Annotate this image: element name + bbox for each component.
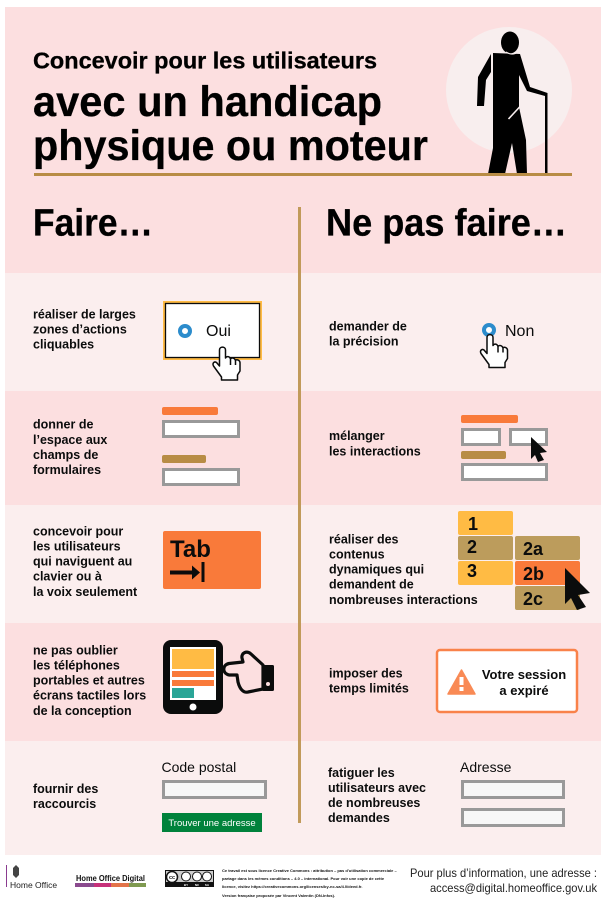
illustration: small radio button — [481, 323, 534, 368]
illustration: nested menu: 2c — [523, 589, 543, 609]
contact text: access@digital.homeoffice.gov.uk — [430, 881, 598, 895]
text: time limits: temps limités — [329, 682, 409, 696]
illustration: long address form — [460, 759, 564, 826]
text: dynamic content: réaliser des — [329, 532, 399, 546]
text: too many demands: de nombreuses — [328, 796, 420, 810]
title — [33, 48, 428, 170]
header rule — [34, 173, 572, 176]
illustration: postcode shortcut form: Code postal — [162, 759, 236, 775]
centre divider — [298, 207, 301, 823]
illustration: session expired alert: Votre session — [482, 667, 566, 682]
illustration: long address form: Adresse — [460, 759, 512, 775]
text: too many demands: utilisateurs avec — [328, 781, 426, 795]
logo: Home Office: Home Office — [10, 880, 57, 890]
illustration: large radio button: Oui — [206, 323, 231, 340]
text: keyboard users: la voix seulement — [33, 585, 138, 599]
text: space form fields: champs de — [33, 448, 98, 462]
logo: Home Office Digital: Home Office Digital — [76, 874, 145, 883]
text: too many demands: demandes — [328, 811, 390, 825]
text: small click area: demander de — [329, 320, 407, 334]
illustration: nested menu: 2 — [467, 537, 477, 557]
heading: don't: Ne pas faire… — [326, 202, 567, 244]
text: dynamic content: demandent de — [329, 578, 414, 592]
text: space form fields: formulaires — [33, 463, 101, 477]
icon: person with cane — [446, 27, 572, 174]
illustration: large radio button — [164, 302, 260, 380]
licence text: licence, visitez https://creativecommons.org/licenses/by-nc-sa/4.0/deed.fr. — [222, 884, 362, 889]
text: dynamic content: dynamiques qui — [329, 562, 424, 576]
text: mobile and touch: les téléphones — [33, 658, 120, 672]
text: shortcuts: raccourcis — [33, 797, 96, 811]
text: mixed interactions: mélanger — [329, 429, 385, 443]
text: mobile and touch: ne pas oublier — [33, 644, 118, 658]
text: dynamic content: contenus — [329, 548, 385, 562]
text: shortcuts: fournir des — [33, 782, 98, 796]
logo: Home Office — [6, 865, 57, 890]
text: small click area: la précision — [329, 334, 398, 348]
text: keyboard users: clavier ou à — [33, 570, 102, 584]
text: space form fields: donner de — [33, 418, 93, 432]
illustration: postcode shortcut form — [162, 759, 266, 832]
illustration: Tab key — [163, 531, 261, 589]
text: large click areas: réaliser de larges — [33, 308, 136, 322]
title: physique ou moteur — [33, 122, 428, 170]
icon: Creative Commons badge: BY — [184, 883, 188, 887]
text: space form fields: l’espace aux — [33, 433, 107, 447]
text: dynamic content: nombreuses interactions — [329, 593, 478, 607]
licence text: partage dans les mêmes conditions – 4.0 – international. Pour voir une copie de cette — [222, 876, 385, 881]
text: keyboard users: concevoir pour — [33, 524, 123, 538]
text: large click areas: cliquables — [33, 338, 94, 352]
illustration: session expired alert: a expiré — [499, 683, 549, 698]
text: mixed interactions: les interactions — [329, 444, 421, 458]
text: keyboard users: qui naviguent au — [33, 554, 132, 568]
illustration: session expired alert — [437, 650, 577, 712]
illustration: Tab key: Tab — [170, 536, 211, 563]
title: Concevoir pour les utilisateurs — [33, 48, 377, 74]
illustration: nested menu: 2a — [523, 539, 544, 559]
icon: Creative Commons badge — [165, 870, 214, 887]
icon: Creative Commons badge: NC — [195, 883, 200, 887]
licence text: Version française proposée par Vincent Valentin (DN-Infos). — [222, 893, 335, 898]
text: large click areas: zones d’actions — [33, 322, 127, 336]
text: too many demands: fatiguer les — [328, 766, 395, 780]
title: avec un handicap — [33, 78, 382, 126]
icon: Creative Commons badge: SA — [205, 883, 210, 887]
illustration: small radio button: Non — [505, 323, 534, 340]
illustration: nested menu: 3 — [467, 561, 477, 581]
heading: do: Faire… — [33, 202, 153, 244]
illustration: nested menu: 1 — [468, 514, 478, 534]
icon: Creative Commons badge: cc — [169, 875, 175, 881]
text: mobile and touch: portables et autres — [33, 674, 145, 688]
text: mobile and touch: de la conception — [33, 704, 132, 718]
illustration: spaced form — [162, 407, 238, 484]
illustration: nested menu — [458, 511, 590, 610]
illustration: nested menu: 2b — [523, 564, 544, 584]
text: keyboard users: les utilisateurs — [33, 540, 121, 554]
contact text — [410, 866, 598, 895]
illustration: mixed form — [461, 415, 547, 480]
logo: Home Office Digital — [75, 874, 146, 887]
illustration: postcode shortcut form: Trouver une adresse — [168, 818, 256, 829]
text: time limits: imposer des — [329, 666, 403, 680]
licence text: Ce travail est sous licence Creative Commons : attribution – pas d’utilisation commerciale – — [222, 868, 397, 873]
illustration: tablet and pointing hand — [163, 640, 274, 714]
text: mobile and touch: écrans tactiles lors — [33, 688, 146, 702]
